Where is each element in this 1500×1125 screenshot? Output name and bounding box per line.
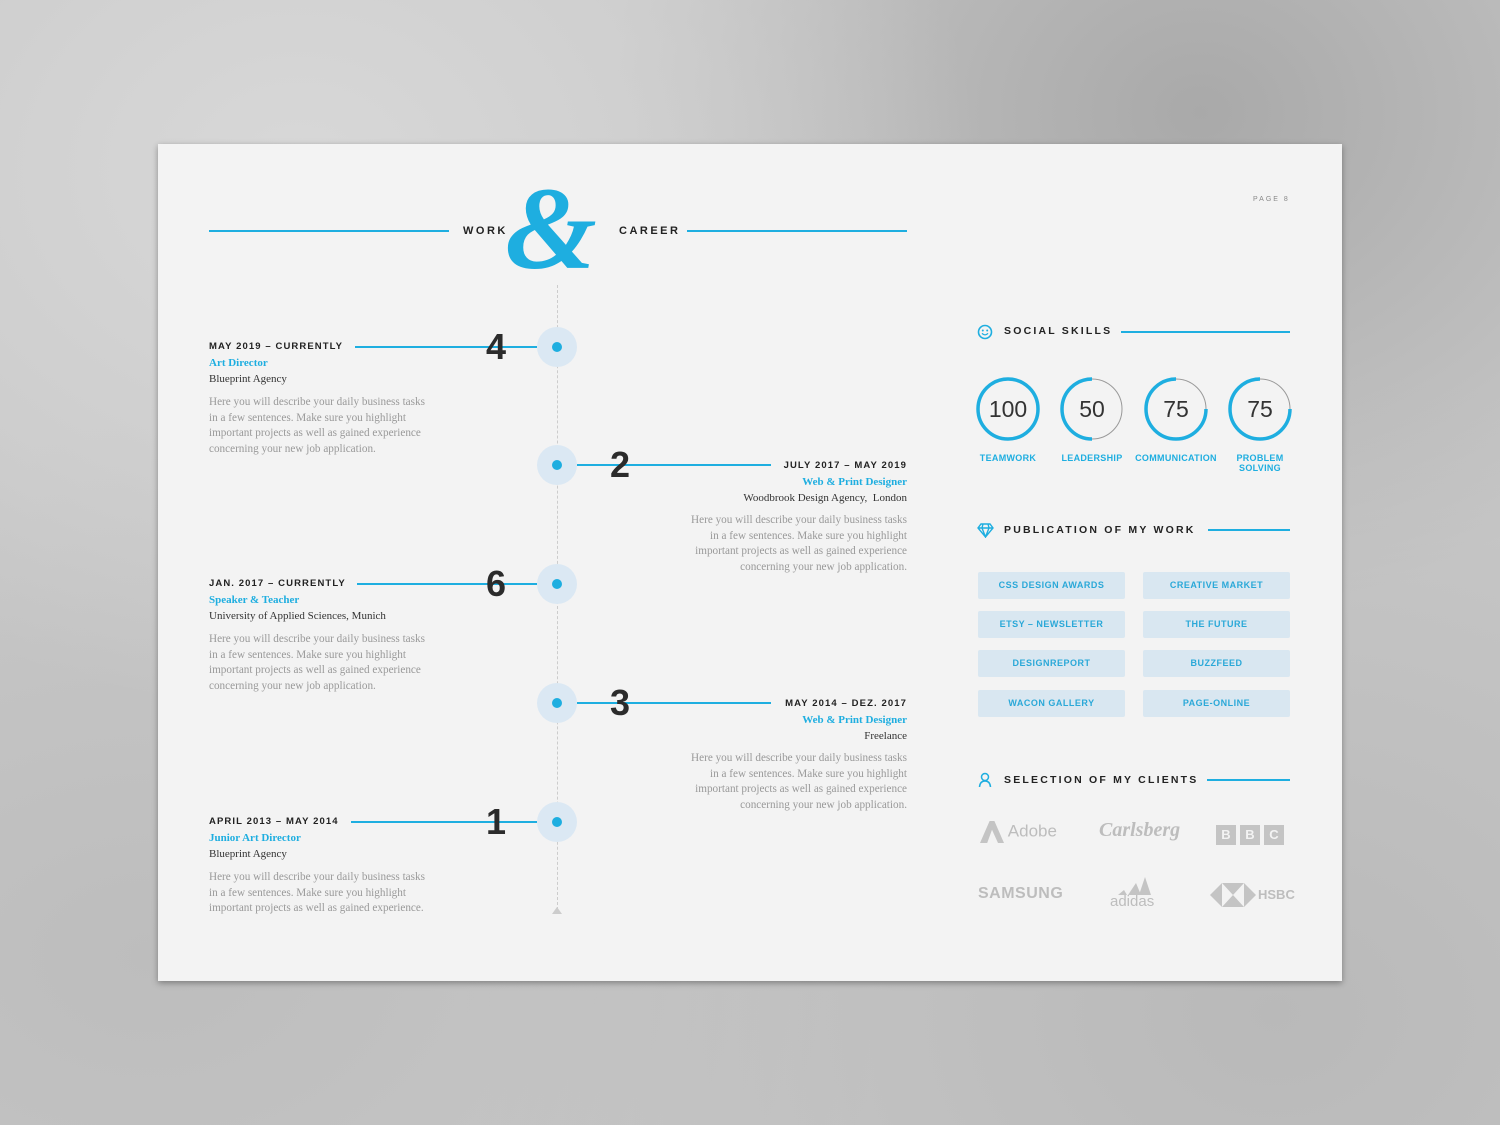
entry 4: Art Director bbox=[209, 357, 268, 369]
entry 2: Web & Print Designer bbox=[802, 476, 907, 488]
client logos bbox=[978, 819, 1295, 910]
page number: PAGE 8 bbox=[1253, 196, 1290, 203]
icon: diamond bbox=[977, 523, 994, 538]
entry 4: concerning your new job application. bbox=[209, 442, 376, 454]
logo: bbc: B bbox=[1245, 827, 1255, 842]
publication buttons: PAGE-ONLINE bbox=[1183, 698, 1250, 708]
entry 6: 6 bbox=[486, 563, 506, 604]
entry 1: important projects as well as gained experience. bbox=[209, 902, 424, 914]
entry 1 bbox=[209, 801, 577, 914]
publication buttons: CSS DESIGN AWARDS bbox=[999, 580, 1104, 590]
entry 2: in a few sentences. Make sure you highlight bbox=[710, 530, 907, 542]
entry 2: 2 bbox=[610, 444, 630, 485]
title: work & career: WORK bbox=[463, 225, 508, 237]
publication buttons bbox=[978, 572, 1290, 717]
logo: adobe: Adobe bbox=[1008, 821, 1057, 840]
entry 4: Blueprint Agency bbox=[209, 373, 287, 385]
logo: carlsberg: Carlsberg bbox=[1099, 819, 1180, 841]
entry 6: in a few sentences. Make sure you highlight bbox=[209, 648, 406, 660]
skill charts bbox=[976, 377, 1292, 441]
entry 4: important projects as well as gained experience bbox=[209, 427, 421, 439]
entry 3: concerning your new job application. bbox=[740, 798, 907, 810]
skill charts: 50 bbox=[1079, 396, 1105, 422]
entry 4: in a few sentences. Make sure you highlight bbox=[209, 412, 406, 424]
paper sheet bbox=[158, 144, 1342, 981]
skill charts: 75 bbox=[1247, 396, 1273, 422]
skill charts: 100 bbox=[989, 396, 1027, 422]
entry 6: important projects as well as gained experience bbox=[209, 664, 421, 676]
entry 2: JULY 2017 – MAY 2019 bbox=[784, 460, 907, 471]
entry 6 bbox=[209, 563, 577, 692]
entry 3: MAY 2014 – DEZ. 2017 bbox=[785, 698, 907, 709]
entry 3: in a few sentences. Make sure you highlight bbox=[710, 768, 907, 780]
heading: clients: SELECTION OF MY CLIENTS bbox=[1004, 774, 1198, 786]
heading: publication: PUBLICATION OF MY WORK bbox=[1004, 524, 1196, 536]
entry 3: Freelance bbox=[864, 730, 907, 742]
entry 1: 1 bbox=[486, 801, 506, 842]
title: work & career: CAREER bbox=[619, 225, 680, 237]
entry 2 bbox=[537, 444, 907, 572]
entry 1: APRIL 2013 – MAY 2014 bbox=[209, 816, 339, 827]
icon: ampersand: & bbox=[505, 163, 597, 294]
logo: hsbc bbox=[1210, 883, 1295, 907]
skill labels: SOLVING bbox=[1239, 463, 1281, 473]
entry 4: 4 bbox=[486, 326, 506, 367]
logo: adidas bbox=[1110, 878, 1154, 910]
entry 1: in a few sentences. Make sure you highlight bbox=[209, 886, 406, 898]
entry 3 bbox=[537, 682, 907, 810]
skill labels: TEAMWORK bbox=[980, 453, 1036, 463]
logo: bbc: C bbox=[1269, 827, 1279, 842]
publication buttons: WACON GALLERY bbox=[1008, 698, 1095, 708]
publication buttons: ETSY – NEWSLETTER bbox=[1000, 619, 1103, 629]
heading: publication bbox=[977, 523, 1290, 538]
heading: social skills: SOCIAL SKILLS bbox=[1004, 325, 1112, 337]
skill labels: LEADERSHIP bbox=[1061, 453, 1122, 463]
entry 3: 3 bbox=[610, 682, 630, 723]
icon: smiley bbox=[978, 324, 992, 340]
logo: adidas: adidas bbox=[1110, 893, 1154, 910]
entry 6: Speaker & Teacher bbox=[209, 594, 299, 606]
entry 6: Here you will describe your daily business tasks bbox=[209, 633, 425, 645]
entry 2: concerning your new job application. bbox=[740, 560, 907, 572]
skill charts: 75 bbox=[1163, 396, 1189, 422]
entry 3: Web & Print Designer bbox=[802, 714, 907, 726]
title: work & career bbox=[209, 163, 907, 294]
publication buttons: THE FUTURE bbox=[1186, 619, 1248, 629]
entry 3: Here you will describe your daily business tasks bbox=[691, 752, 907, 764]
publication buttons: BUZZFEED bbox=[1190, 658, 1242, 668]
skill labels: PROBLEM bbox=[1236, 453, 1284, 463]
logo: bbc bbox=[1216, 825, 1284, 845]
entry 1: Junior Art Director bbox=[209, 832, 301, 844]
logo: adobe bbox=[980, 821, 1057, 843]
entry 1: Blueprint Agency bbox=[209, 848, 287, 860]
icon: person bbox=[978, 772, 992, 787]
publication buttons: DESIGNREPORT bbox=[1012, 658, 1090, 668]
heading: social skills bbox=[978, 324, 1290, 340]
timeline axis bbox=[557, 285, 558, 910]
entry 2: Here you will describe your daily business tasks bbox=[691, 514, 907, 526]
entry 6: concerning your new job application. bbox=[209, 680, 376, 692]
skill labels: COMMUNICATION bbox=[1135, 453, 1217, 463]
publication buttons: CREATIVE MARKET bbox=[1170, 580, 1263, 590]
entry 6: University of Applied Sciences, Munich bbox=[209, 610, 386, 622]
entry 1: Here you will describe your daily business tasks bbox=[209, 871, 425, 883]
logo: samsung: SAMSUNG bbox=[978, 885, 1063, 902]
heading: clients bbox=[978, 772, 1290, 787]
entry 4: Here you will describe your daily business tasks bbox=[209, 396, 425, 408]
skill labels bbox=[980, 453, 1284, 473]
logo: bbc: B bbox=[1221, 827, 1231, 842]
entry 3: important projects as well as gained experience bbox=[695, 783, 907, 795]
logo: hsbc: HSBC bbox=[1258, 887, 1295, 902]
entry 4: MAY 2019 – CURRENTLY bbox=[209, 341, 343, 352]
entry 6: JAN. 2017 – CURRENTLY bbox=[209, 578, 346, 589]
entry 2: important projects as well as gained experience bbox=[695, 545, 907, 557]
entry 4 bbox=[209, 326, 577, 454]
arrow: timeline end bbox=[552, 907, 562, 914]
entry 2: Woodbrook Design Agency, London bbox=[743, 492, 907, 504]
